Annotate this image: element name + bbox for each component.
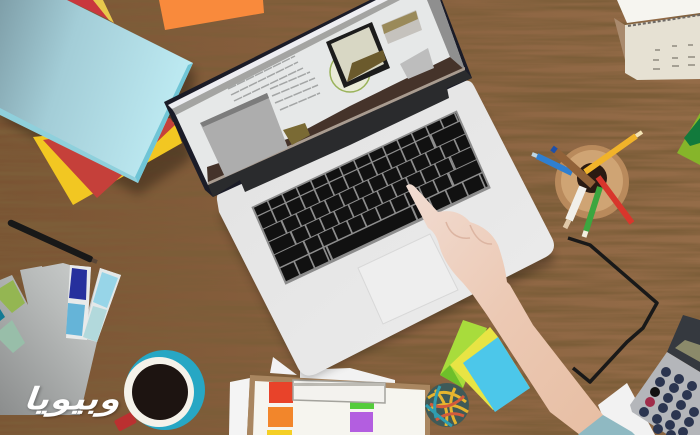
sleeve cuff — [578, 415, 635, 435]
grey dialog — [200, 93, 288, 177]
hinge — [208, 70, 472, 197]
clipboard with colour chart — [247, 375, 430, 435]
food photo — [283, 123, 310, 145]
colourful thumbnail — [381, 10, 422, 44]
black pencil — [11, 223, 97, 262]
pencils — [532, 132, 642, 237]
arm and pointing hand — [406, 184, 635, 435]
coffee cup on saucer — [114, 350, 205, 432]
small window — [400, 48, 434, 79]
swatches — [0, 268, 118, 353]
light blue book — [0, 0, 193, 183]
metal clip — [293, 380, 385, 403]
calculator keys — [639, 367, 699, 435]
calendar — [614, 0, 700, 80]
phone mockup — [326, 22, 390, 92]
sticky notes — [440, 320, 530, 412]
papers under clipboard — [229, 357, 395, 435]
colour blocks — [267, 382, 375, 435]
rubber band ball — [425, 383, 469, 427]
calculator — [630, 315, 700, 435]
laptop — [164, 0, 555, 380]
watermark logo: وبیویا — [22, 382, 120, 417]
orange sticky note — [159, 0, 264, 30]
screen display — [168, 0, 465, 185]
keyboard — [251, 110, 491, 285]
sidebar — [427, 0, 465, 70]
screen bezel — [164, 0, 472, 197]
laptop base — [217, 81, 554, 376]
eyeglasses — [568, 238, 657, 382]
text lines — [228, 56, 320, 110]
pencil cup — [532, 132, 642, 237]
watermark logo: وبیویا — [23, 383, 121, 418]
colour swatch fan — [0, 263, 121, 415]
green wrapped package — [677, 113, 700, 165]
trackpad — [358, 234, 458, 324]
stack of books — [0, 0, 195, 205]
white paper under calculator — [598, 383, 655, 435]
page footer — [207, 57, 465, 185]
